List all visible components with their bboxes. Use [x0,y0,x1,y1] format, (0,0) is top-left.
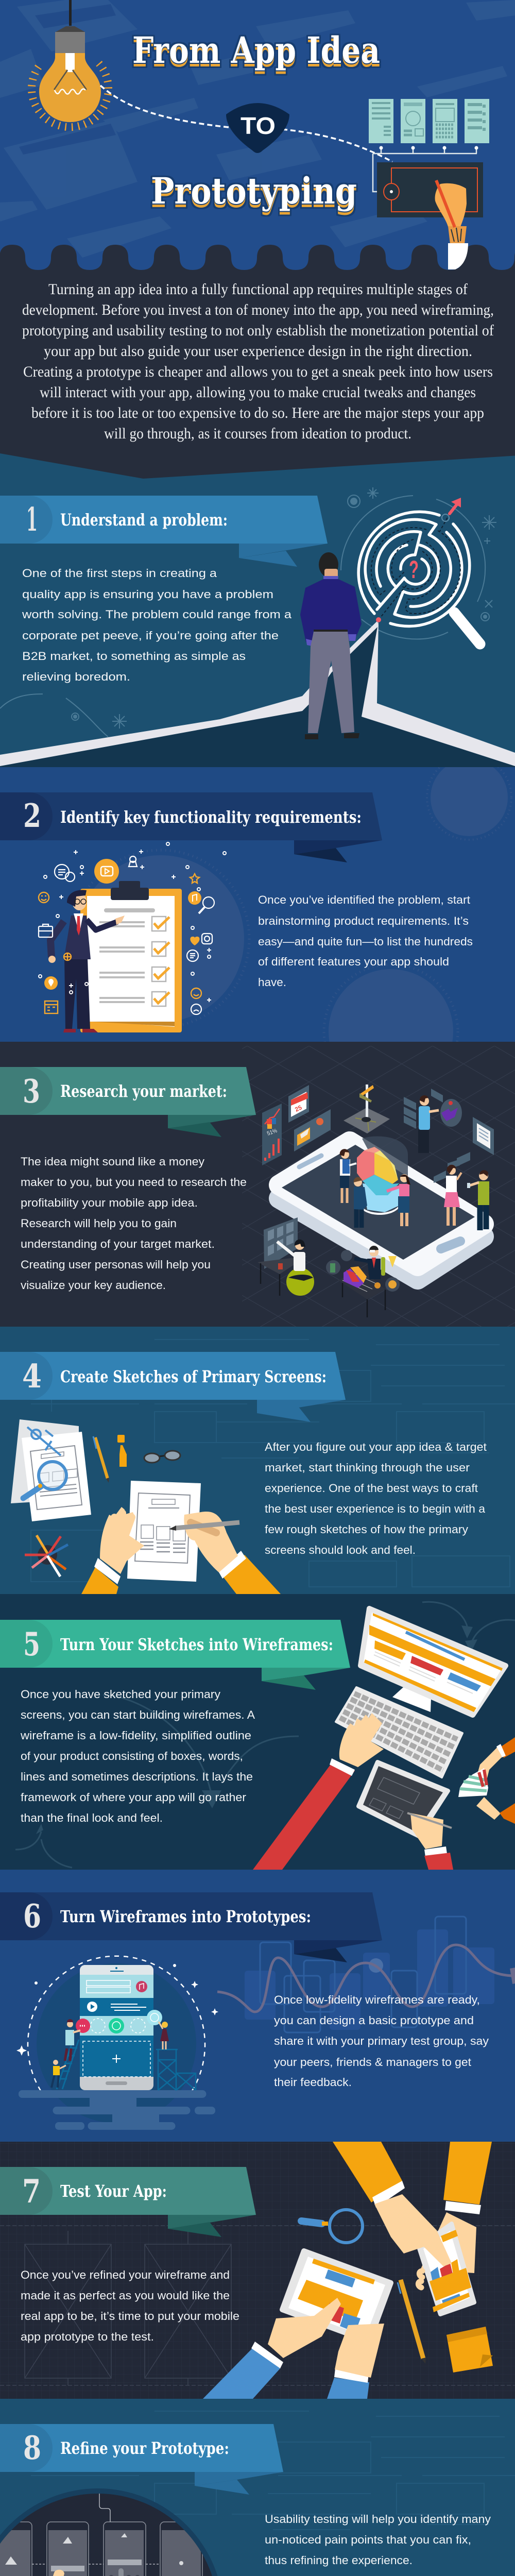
ribbon heading 7: 7 [22,2172,41,2210]
panel: hero header [0,0,515,273]
ribbon heading 1 [0,496,328,567]
colour swatch and hands [458,1737,515,1824]
badge: TO [226,103,289,153]
text: step 7 body [21,2268,239,2343]
text: step 5 body: screens, you can start building wireframes. A [21,1708,255,1721]
panel: step 7 test your app [0,2142,515,2399]
text: step 2 body: brainstorming product requirements. It’s [258,914,469,927]
text: step 8 body: Usability testing will help you identify many [265,2513,491,2526]
text: step 7 body: made it as perfect as you would like the [21,2289,230,2302]
panel: intro text block: Creating a prototype is cheaper and allows you to get a sneak peek into how users [23,363,493,380]
road left edge [0,621,379,766]
panel: intro text block: before it is too late or too expensive to do so. Here are the major steps your app [31,404,484,421]
text: step 4 body: market, start thinking through the user [265,1461,470,1474]
scaffold, ladder and workers [16,1964,218,2090]
decorative rings [0,487,496,737]
icon: tablet with drawing hand [377,162,483,244]
ribbon heading 8: Refine your Prototype: [60,2438,229,2458]
text: step 7 body: Once you’ve refined your wireframe and [21,2268,230,2281]
ribbon heading 8 [0,2424,283,2495]
faint sketched wireframes [31,2411,515,2576]
panel: intro text block: will interact with your app, allowing you to make crucial tweaks and changes [40,384,476,401]
faint blueprint frames [0,2226,515,2385]
text: step 4 body: few rough sketches of how the primary [265,1523,468,1536]
ribbon heading 1: Understand a problem: [60,510,228,530]
ribbon heading 3: 3 [23,1072,40,1110]
text: step 8 body: un-noticed pain points that you can fix, [265,2533,471,2546]
text: step 1 body: One of the first steps in creating a [22,567,217,580]
man from behind [300,552,362,739]
floating data cards: 25 [294,1104,303,1113]
icon: light bulb [32,0,108,127]
road right edge [362,621,515,766]
clipboard checklist [80,881,182,1032]
background circles [74,767,512,1042]
keyboard [336,1687,462,1777]
panel: step 8 refine your prototype [0,2399,515,2576]
pie chart hologram [357,1136,408,1215]
faint arrows [15,1602,515,1868]
phone held in hand [374,2194,474,2314]
businessman [48,890,125,1032]
panel: step 2 key functionality [0,767,515,1042]
text: step 6 body: share it with your primary test group, say [274,2035,489,2047]
text: step 2 body: of different features your app should [258,955,449,968]
text: step 2 body: Once you’ve identified the problem, start [258,893,470,906]
text: step 2 body: have. [258,976,286,989]
text: step 2 body [258,893,473,989]
ribbon heading 2: 2 [23,796,41,835]
text: step 4 body: the best user experience is to begin with a [265,1502,486,1515]
text: step 3 body [21,1155,247,1292]
desktop monitor [360,1608,506,1715]
panel: step 1 background [0,453,515,767]
isometric people [258,1095,489,1317]
text: step 5 body [20,1688,255,1824]
text: step 6 body: your peers, friends & managers to get [274,2056,471,2069]
panel: step 1 understand a problem [0,487,515,767]
tablet [282,2251,391,2342]
panel: intro text block: your app but also guide your user experience design in the right direction. [44,343,472,360]
text: step 5 body: wireframe is a low-fidelity, simplified outline [20,1729,251,1742]
ribbon heading 1: 1 [26,500,38,538]
prototype phone under construction [19,1956,215,2130]
sketch papers with magnifier [11,1419,91,1521]
title: Prototyping: Prototyping [151,170,357,212]
panel: step 6 prototypes [0,1870,515,2142]
text: step 6 body [274,1993,489,2089]
maze magnifier: ? [409,556,419,584]
badge: TO: TO [241,112,276,139]
ribbon heading 3: Research your market: [60,1081,227,1101]
ribbon heading 7: Test Your App: [60,2181,167,2201]
text: step 5 body: lines and sometimes descriptions. It lays the [21,1770,253,1783]
pencil [398,2280,426,2364]
lower hands and blue sleeves [203,2298,384,2399]
text: step 3 body: visualize your key audience. [21,1279,166,1292]
text: step 4 body: experience. One of the best ways to craft [265,1482,478,1495]
floating data cards [262,1084,494,1183]
text: step 3 body: The idea might sound like a money [21,1155,204,1168]
ribbon heading 5 [0,1620,350,1690]
ribbon heading 3 [0,1067,256,1137]
dashed connector line [100,86,392,162]
ribbon heading 6: 6 [23,1897,41,1935]
paper with wireframe sketch [127,1481,201,1582]
ribbon heading 6 [0,1892,382,1962]
ribbon heading 2 [0,792,382,862]
ribbon heading 7 [0,2167,256,2237]
ribbon heading 4: Create Sketches of Primary Screens: [60,1367,327,1386]
text: step 1 body: B2B market, to something as simple as [22,650,246,663]
text: step 2 body: easy—and quite fun—to list the hundreds [258,935,473,948]
text: step 1 body: worth solving. The problem could range from a [22,608,292,621]
ribbon heading 4: 4 [22,1357,42,1395]
ribbon heading 8: 8 [23,2429,41,2467]
ribbon heading 6: Turn Wireframes into Prototypes: [60,1907,311,1926]
panel: step 5 wireframes [0,1594,515,1870]
text: step 4 body [265,1440,487,1556]
text: step 3 body: Creating user personas will help you [21,1258,211,1271]
circular wireframe flow with hands [0,2488,224,2576]
panel: step 3 research your market [0,1042,515,1327]
faint sketched wireframes [31,1340,515,1587]
text: step 4 body: After you figure out your app idea & target [265,1440,487,1453]
text: step 7 body: app prototype to the test. [21,2330,154,2343]
text: step 8 body [264,2513,491,2576]
text: step 5 body: framework of where your app will go rather [21,1791,246,1804]
pen, marker and glasses [93,1435,180,1483]
panel: intro text block: Turning an app idea into a fully functional app requires multiple stages of [48,281,468,298]
magnifier [301,2210,363,2243]
text: step 1 body: quality app is ensuring you have a problem [22,588,273,601]
isometric phone [279,1142,484,1279]
floating feature icons [39,842,226,1014]
text: step 5 body: than the final look and feel. [21,1811,163,1824]
text: step 3 body: maker to you, but you need to research the [21,1176,247,1189]
text: step 1 body: corporate pet peeve, if you’re going after the [22,629,279,642]
text: step 3 body: profitability your mobile app idea. [21,1196,198,1209]
text: step 5 body: Once you have sketched your primary [21,1688,220,1701]
panel: intro text block [0,243,515,479]
hands and sleeves drawing [81,1507,281,1594]
text: step 6 body: Once low-fidelity wireframes are ready, [274,1993,480,2006]
ribbon heading 5: Turn Your Sketches into Wireframes: [60,1635,333,1654]
floating data cards: 51% [266,1128,278,1137]
ribbon heading 4 [0,1352,346,1422]
hands on keyboard and tablet [253,1713,453,1870]
tablet with pen [358,1762,448,1836]
text: step 3 body: understanding of your target market. [21,1238,215,1250]
floor and road [0,624,515,767]
colored pencils [25,1535,68,1577]
panel: step 4 create sketches [0,1327,515,1594]
ribbon heading 5: 5 [23,1625,40,1663]
maze magnifier [358,498,480,644]
text: step 4 body: screens should look and feel. [265,1544,416,1556]
text: step 1 body: relieving boredom. [22,670,130,683]
text: step 6 body: you can design a basic prototype and [274,2014,474,2027]
text: step 6 body: their feedback. [274,2076,352,2089]
text: step 8 body: thus refining the experience. [265,2554,413,2567]
sticky note [447,2327,493,2372]
panel: intro text block: will go through, as it courses from ideation to product. [104,425,411,442]
title: From App Idea: From App Idea [132,29,380,72]
text: step 7 body: real app to be, it’s time to put your mobile [21,2310,239,2323]
ribbon heading 2: Identify key functionality requirements: [60,807,362,827]
upper hands and orange sleeves [333,2142,492,2273]
icon: wireframe screens [369,99,489,192]
text: step 3 body: Research will help you to gain [21,1217,177,1230]
text: step 5 body: of your product consisting of boxes, words, [21,1750,243,1762]
faint wireframe flow [217,1917,515,2032]
text: step 1 body [22,567,292,683]
